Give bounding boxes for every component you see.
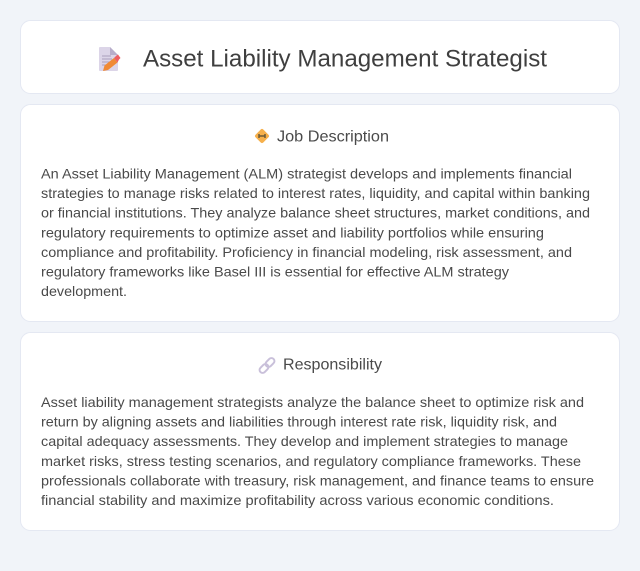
text block: responsibility: capital adequacy assessments. They develop and implement strategies to manage [41, 433, 568, 449]
panel: job description [20, 104, 620, 322]
text block: responsibility: financial stability and maximize profitability across various economic conditions. [41, 492, 554, 508]
text block: responsibility [41, 394, 594, 508]
icon: chain link [258, 357, 276, 374]
text block: job description: strategies to manage risks related to interest rates, liquidity, and capital within banking [41, 185, 590, 201]
title text: Asset Liability Management Strategist [143, 46, 547, 72]
text block: responsibility: market risks, stress testing scenarios, and regulatory compliance frameworks. These [41, 453, 581, 469]
panel: responsibility [20, 332, 620, 530]
heading: responsibility: Responsibility [283, 356, 382, 374]
text block: job description: compliance and profitability. Proficiency in financial modeling, risk assessment, and [41, 244, 572, 260]
text block: responsibility: professionals collaborate with treasury, risk management, and finance teams to ensure [41, 472, 594, 488]
text block: job description: development. [41, 283, 127, 299]
panel: title [20, 20, 620, 94]
text block: responsibility: return by aligning assets and liabilities through interest rate risk, liquidity risk, and [41, 414, 557, 430]
text block: job description: regulatory frameworks like Basel III is essential for effective ALM strategy [41, 264, 509, 280]
text block: job description: An Asset Liability Management (ALM) strategist develops and implements financial [41, 166, 572, 182]
heading: job description: Job Description [277, 128, 389, 146]
text block: responsibility: Asset liability management strategists analyze the balance sheet to optimize risk and [41, 394, 584, 410]
text block: job description: or financial institutions. They analyze balance sheet structures, market conditions, and [41, 205, 590, 221]
icon: document with pencil [99, 47, 120, 71]
icon: diamond sign [254, 128, 270, 144]
text block: job description [41, 166, 590, 299]
text block: job description: regulatory requirements to optimize asset and liability portfolios while ensuring [41, 224, 544, 240]
